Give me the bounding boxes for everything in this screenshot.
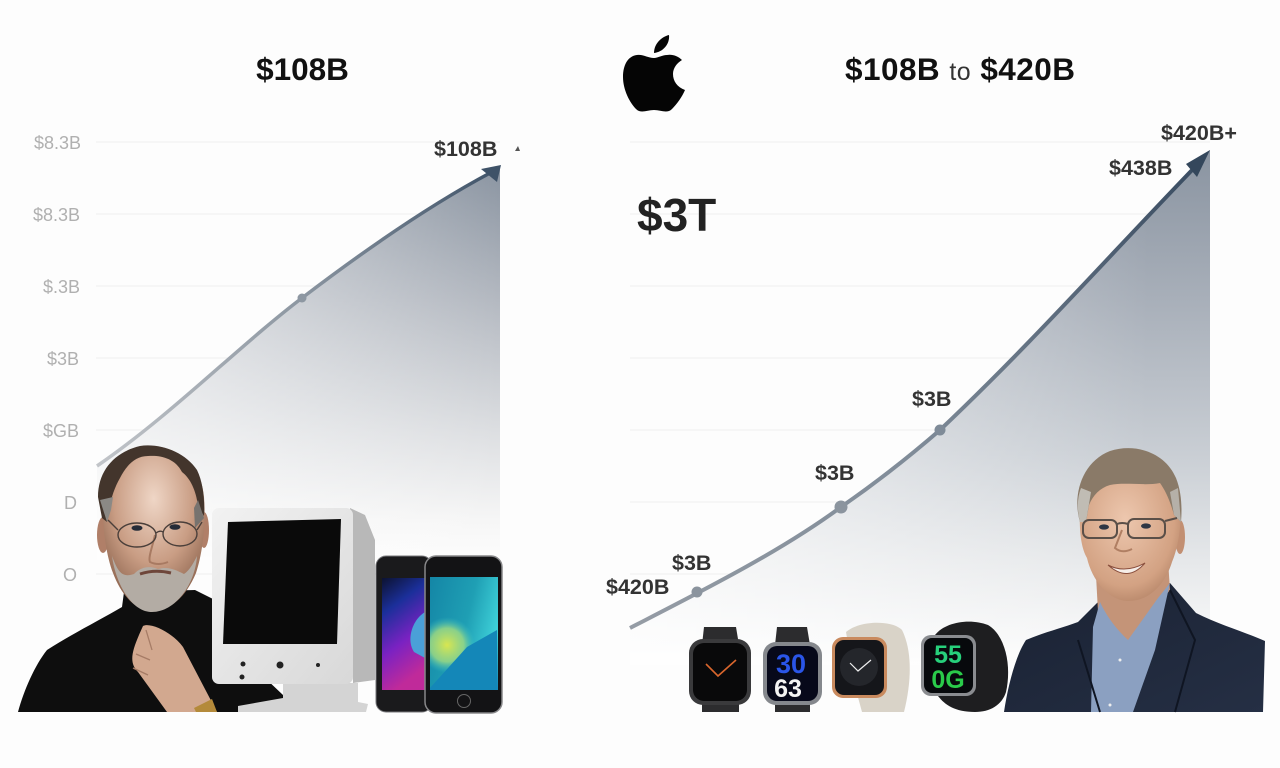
lapels (1078, 590, 1195, 712)
mouth (140, 571, 171, 574)
eyes (1099, 523, 1151, 530)
big valuation callout: $3T (637, 189, 716, 241)
watch 4: 55 (934, 641, 962, 669)
side panel (350, 508, 375, 683)
watch (194, 699, 217, 712)
area fill (630, 150, 1210, 665)
value labels: $420B+ (1161, 121, 1237, 145)
icon: white desktop computer (212, 508, 375, 712)
panel: left growth chart (33, 133, 520, 585)
portrait: Steve Jobs (18, 445, 283, 712)
area fill (97, 167, 500, 560)
stand (238, 683, 368, 712)
hair (1077, 448, 1181, 522)
gridlines (630, 142, 1210, 574)
ear (1175, 520, 1185, 554)
growth curve with arrow (97, 165, 501, 466)
rear phone (376, 556, 432, 712)
hair (98, 445, 204, 528)
axis labels: O (63, 565, 77, 585)
glasses (108, 520, 202, 547)
front bezel (212, 508, 353, 684)
icon: apple logo (623, 35, 685, 112)
growth curve with arrow (630, 150, 1210, 628)
axis labels: $8.3B (34, 133, 81, 153)
icon: smartwatch row (689, 622, 1008, 712)
watch 1 (689, 627, 751, 712)
value labels: $3B (912, 387, 951, 411)
icon: two smartphones (376, 556, 502, 713)
axis labels: D (64, 493, 77, 513)
suit jacket (1004, 583, 1265, 712)
shirt (1091, 583, 1170, 712)
value labels: $3B (815, 461, 854, 485)
smile (1108, 563, 1145, 574)
area fade overlay (630, 150, 1210, 665)
small mark (515, 146, 520, 151)
title: left revenue: $108B (256, 51, 349, 87)
front phone (425, 556, 502, 713)
watch 4: 0G (931, 666, 965, 694)
axis labels: $3B (47, 349, 79, 369)
gridlines (96, 142, 500, 574)
hand (132, 625, 217, 712)
face (1080, 465, 1181, 601)
title: right revenue range: $108B to $420B (845, 51, 1075, 87)
watch 3 (832, 623, 910, 712)
beard (112, 556, 197, 612)
axis labels: $.3B (43, 277, 80, 297)
glasses (1083, 518, 1177, 538)
panel: right growth chart (606, 121, 1237, 665)
neck (1096, 560, 1170, 650)
value labels: $3B (672, 551, 711, 575)
eyes (132, 524, 180, 531)
axis labels: $GB (43, 421, 79, 441)
nose (1115, 530, 1132, 551)
black turtleneck (18, 590, 283, 712)
value label: $108B (434, 137, 497, 161)
nose (149, 535, 168, 564)
value labels: $438B (1109, 156, 1172, 180)
area fade overlay (97, 167, 500, 560)
portrait: Tim Cook (1004, 448, 1265, 712)
screen (223, 519, 341, 644)
watch 4 (921, 622, 1008, 712)
axis labels (33, 133, 81, 585)
watch 2: 30 (776, 649, 806, 679)
value labels (606, 121, 1237, 599)
value labels: $420B (606, 575, 669, 599)
watch 2 (763, 627, 822, 712)
front controls (240, 662, 320, 680)
ears (97, 512, 209, 553)
face (103, 446, 205, 611)
watch 2: 63 (774, 675, 802, 703)
axis labels: $8.3B (33, 205, 80, 225)
